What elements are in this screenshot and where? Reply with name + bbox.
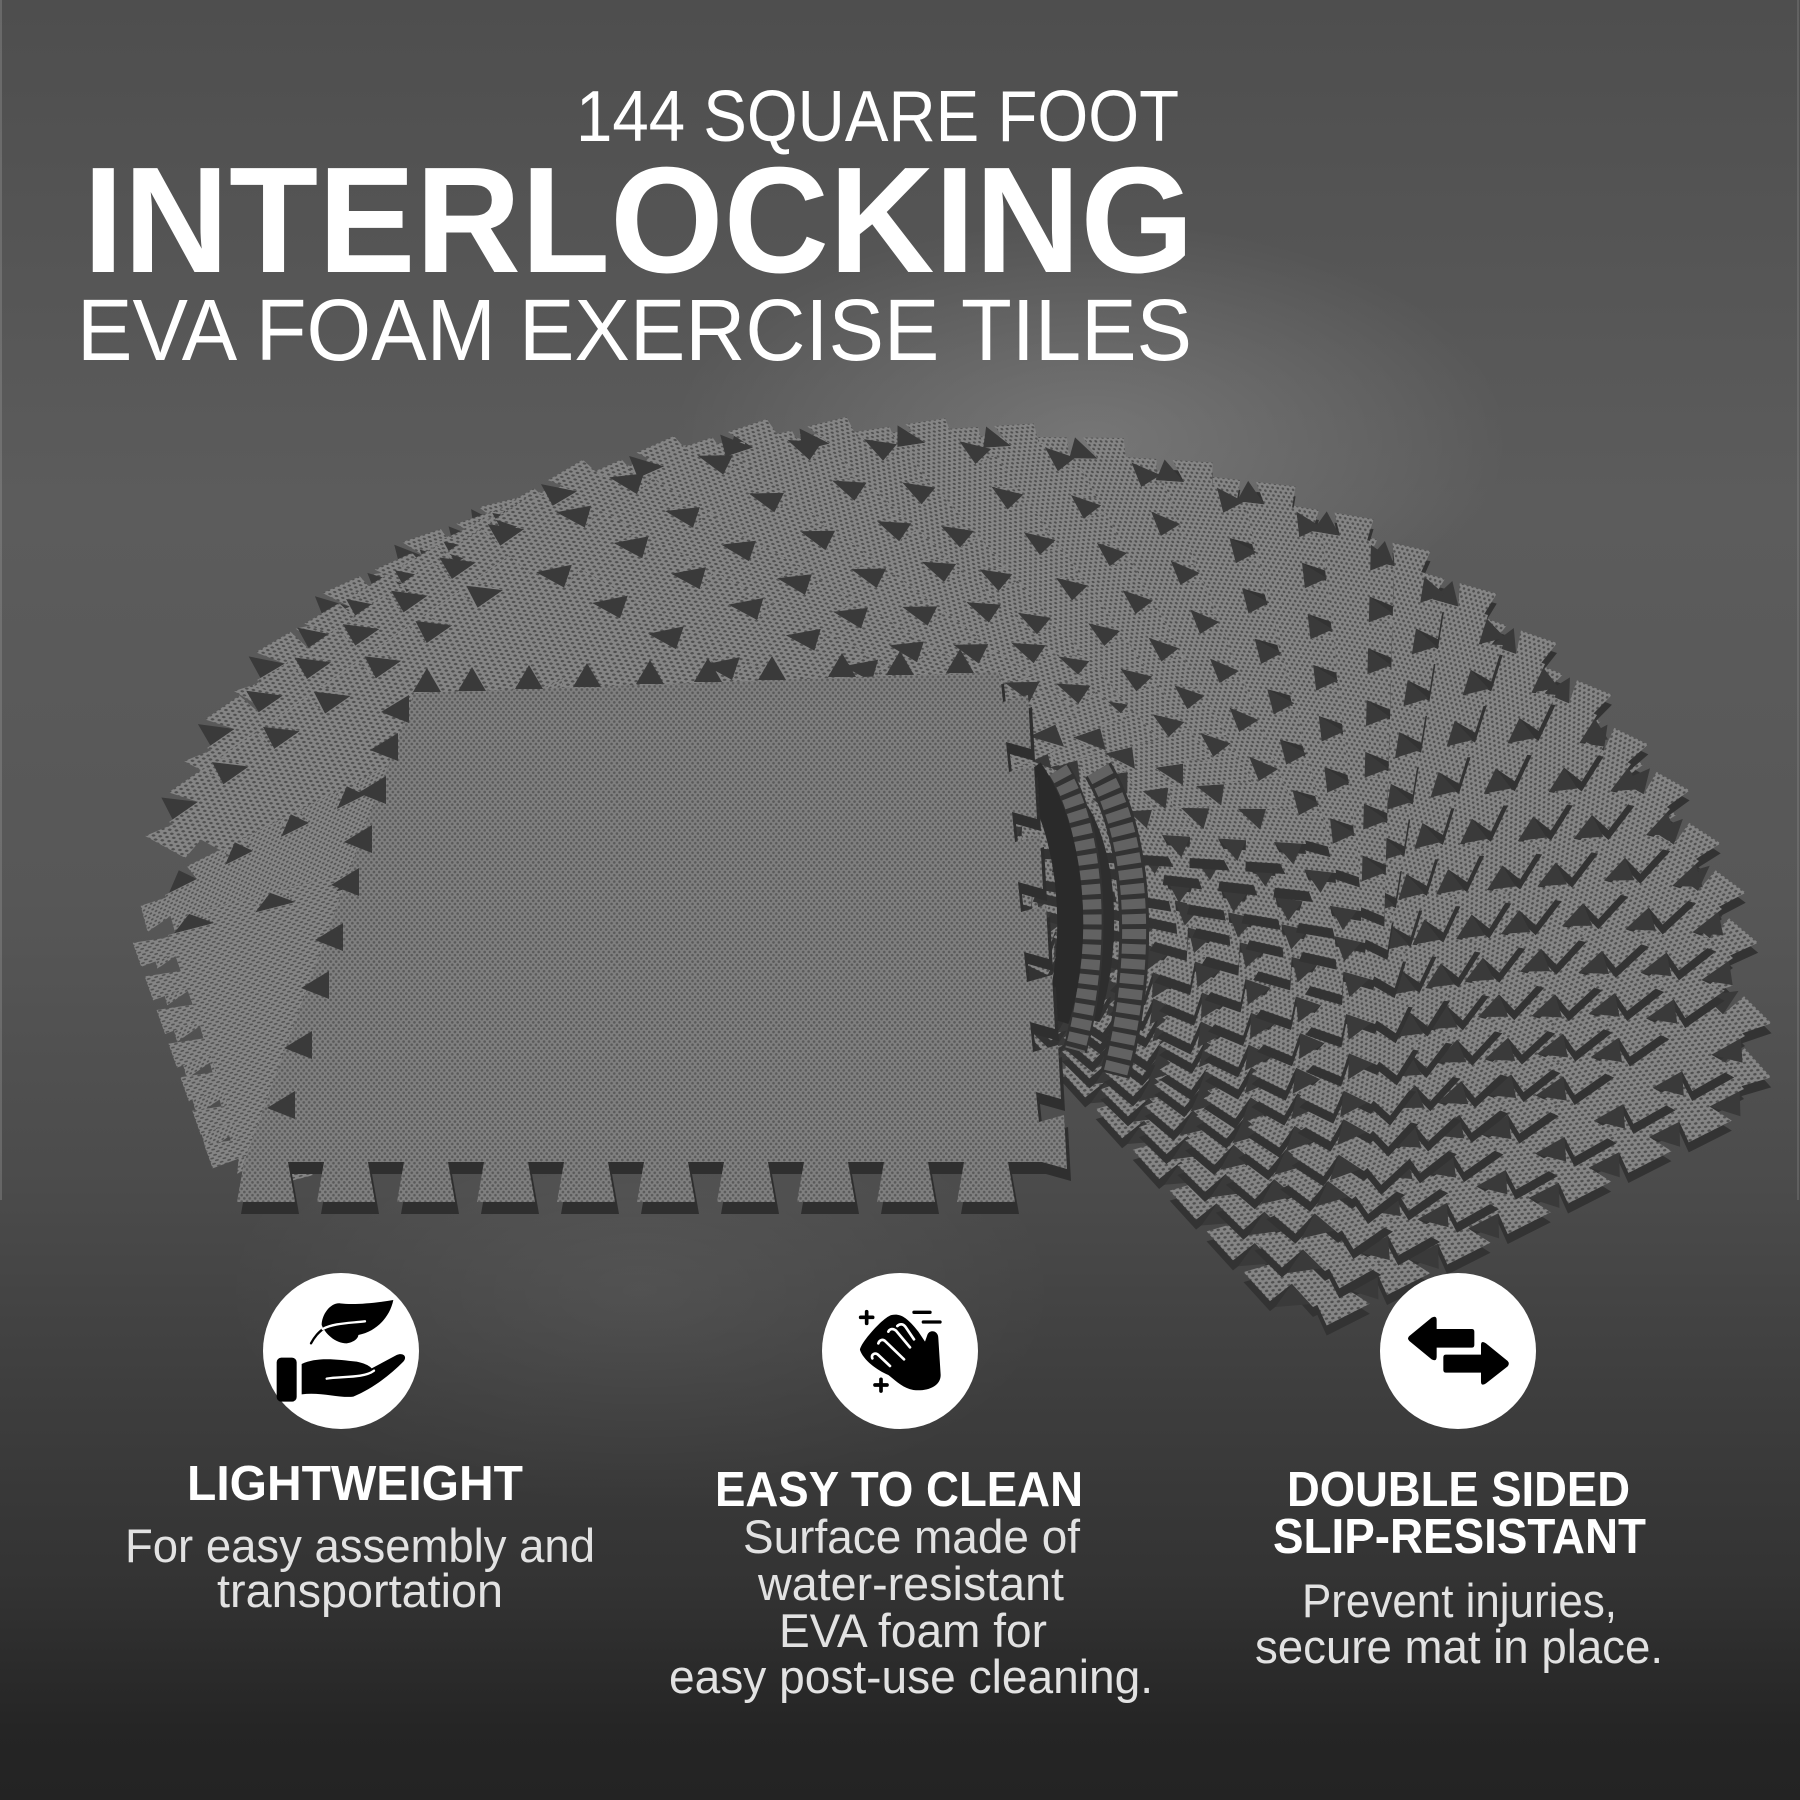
heading: easy to clean: EASY TO CLEAN bbox=[715, 1463, 1083, 1517]
description: lightweight: transportation bbox=[217, 1564, 503, 1617]
description: double sided: secure mat in place. bbox=[1255, 1620, 1663, 1673]
foam tile fan bbox=[123, 412, 1787, 1348]
heading: double sided slip-resistant: DOUBLE SIDED bbox=[1287, 1463, 1630, 1517]
heading: double sided slip-resistant: SLIP-RESISTANT bbox=[1273, 1510, 1646, 1564]
description: easy to clean: easy post-use cleaning. bbox=[669, 1650, 1153, 1703]
title line: interlocking: INTERLOCKING bbox=[83, 135, 1194, 304]
description: easy to clean bbox=[669, 1510, 1153, 1703]
description: double sided: Prevent injuries, bbox=[1302, 1574, 1617, 1627]
heading: lightweight: LIGHTWEIGHT bbox=[187, 1457, 523, 1511]
title line: EVA foam exercise tiles: EVA FOAM EXERCISE TILES bbox=[77, 282, 1192, 379]
description: easy to clean: Surface made of bbox=[743, 1510, 1081, 1563]
icon: two-way arrows bbox=[1380, 1273, 1536, 1429]
description: lightweight: For easy assembly and bbox=[125, 1519, 595, 1572]
description: double sided bbox=[1255, 1574, 1663, 1673]
feature: double sided slip-resistant bbox=[1255, 1273, 1663, 1673]
description: easy to clean: water-resistant bbox=[757, 1557, 1064, 1610]
feature: easy to clean bbox=[669, 1273, 1153, 1703]
icon: hand holding leaf bbox=[263, 1273, 419, 1429]
heading: double sided slip-resistant bbox=[1273, 1463, 1646, 1564]
icon: washing hands bbox=[822, 1273, 978, 1429]
inner stacked tile edges bbox=[1030, 770, 1134, 1075]
title bbox=[77, 77, 1194, 379]
description: easy to clean: EVA foam for bbox=[779, 1604, 1047, 1657]
front foam tile bbox=[237, 649, 1071, 1214]
front tile notches bbox=[267, 649, 974, 1119]
feature: lightweight bbox=[125, 1273, 595, 1617]
description: lightweight bbox=[125, 1519, 595, 1617]
title line: 144 square foot: 144 SQUARE FOOT bbox=[576, 77, 1179, 157]
